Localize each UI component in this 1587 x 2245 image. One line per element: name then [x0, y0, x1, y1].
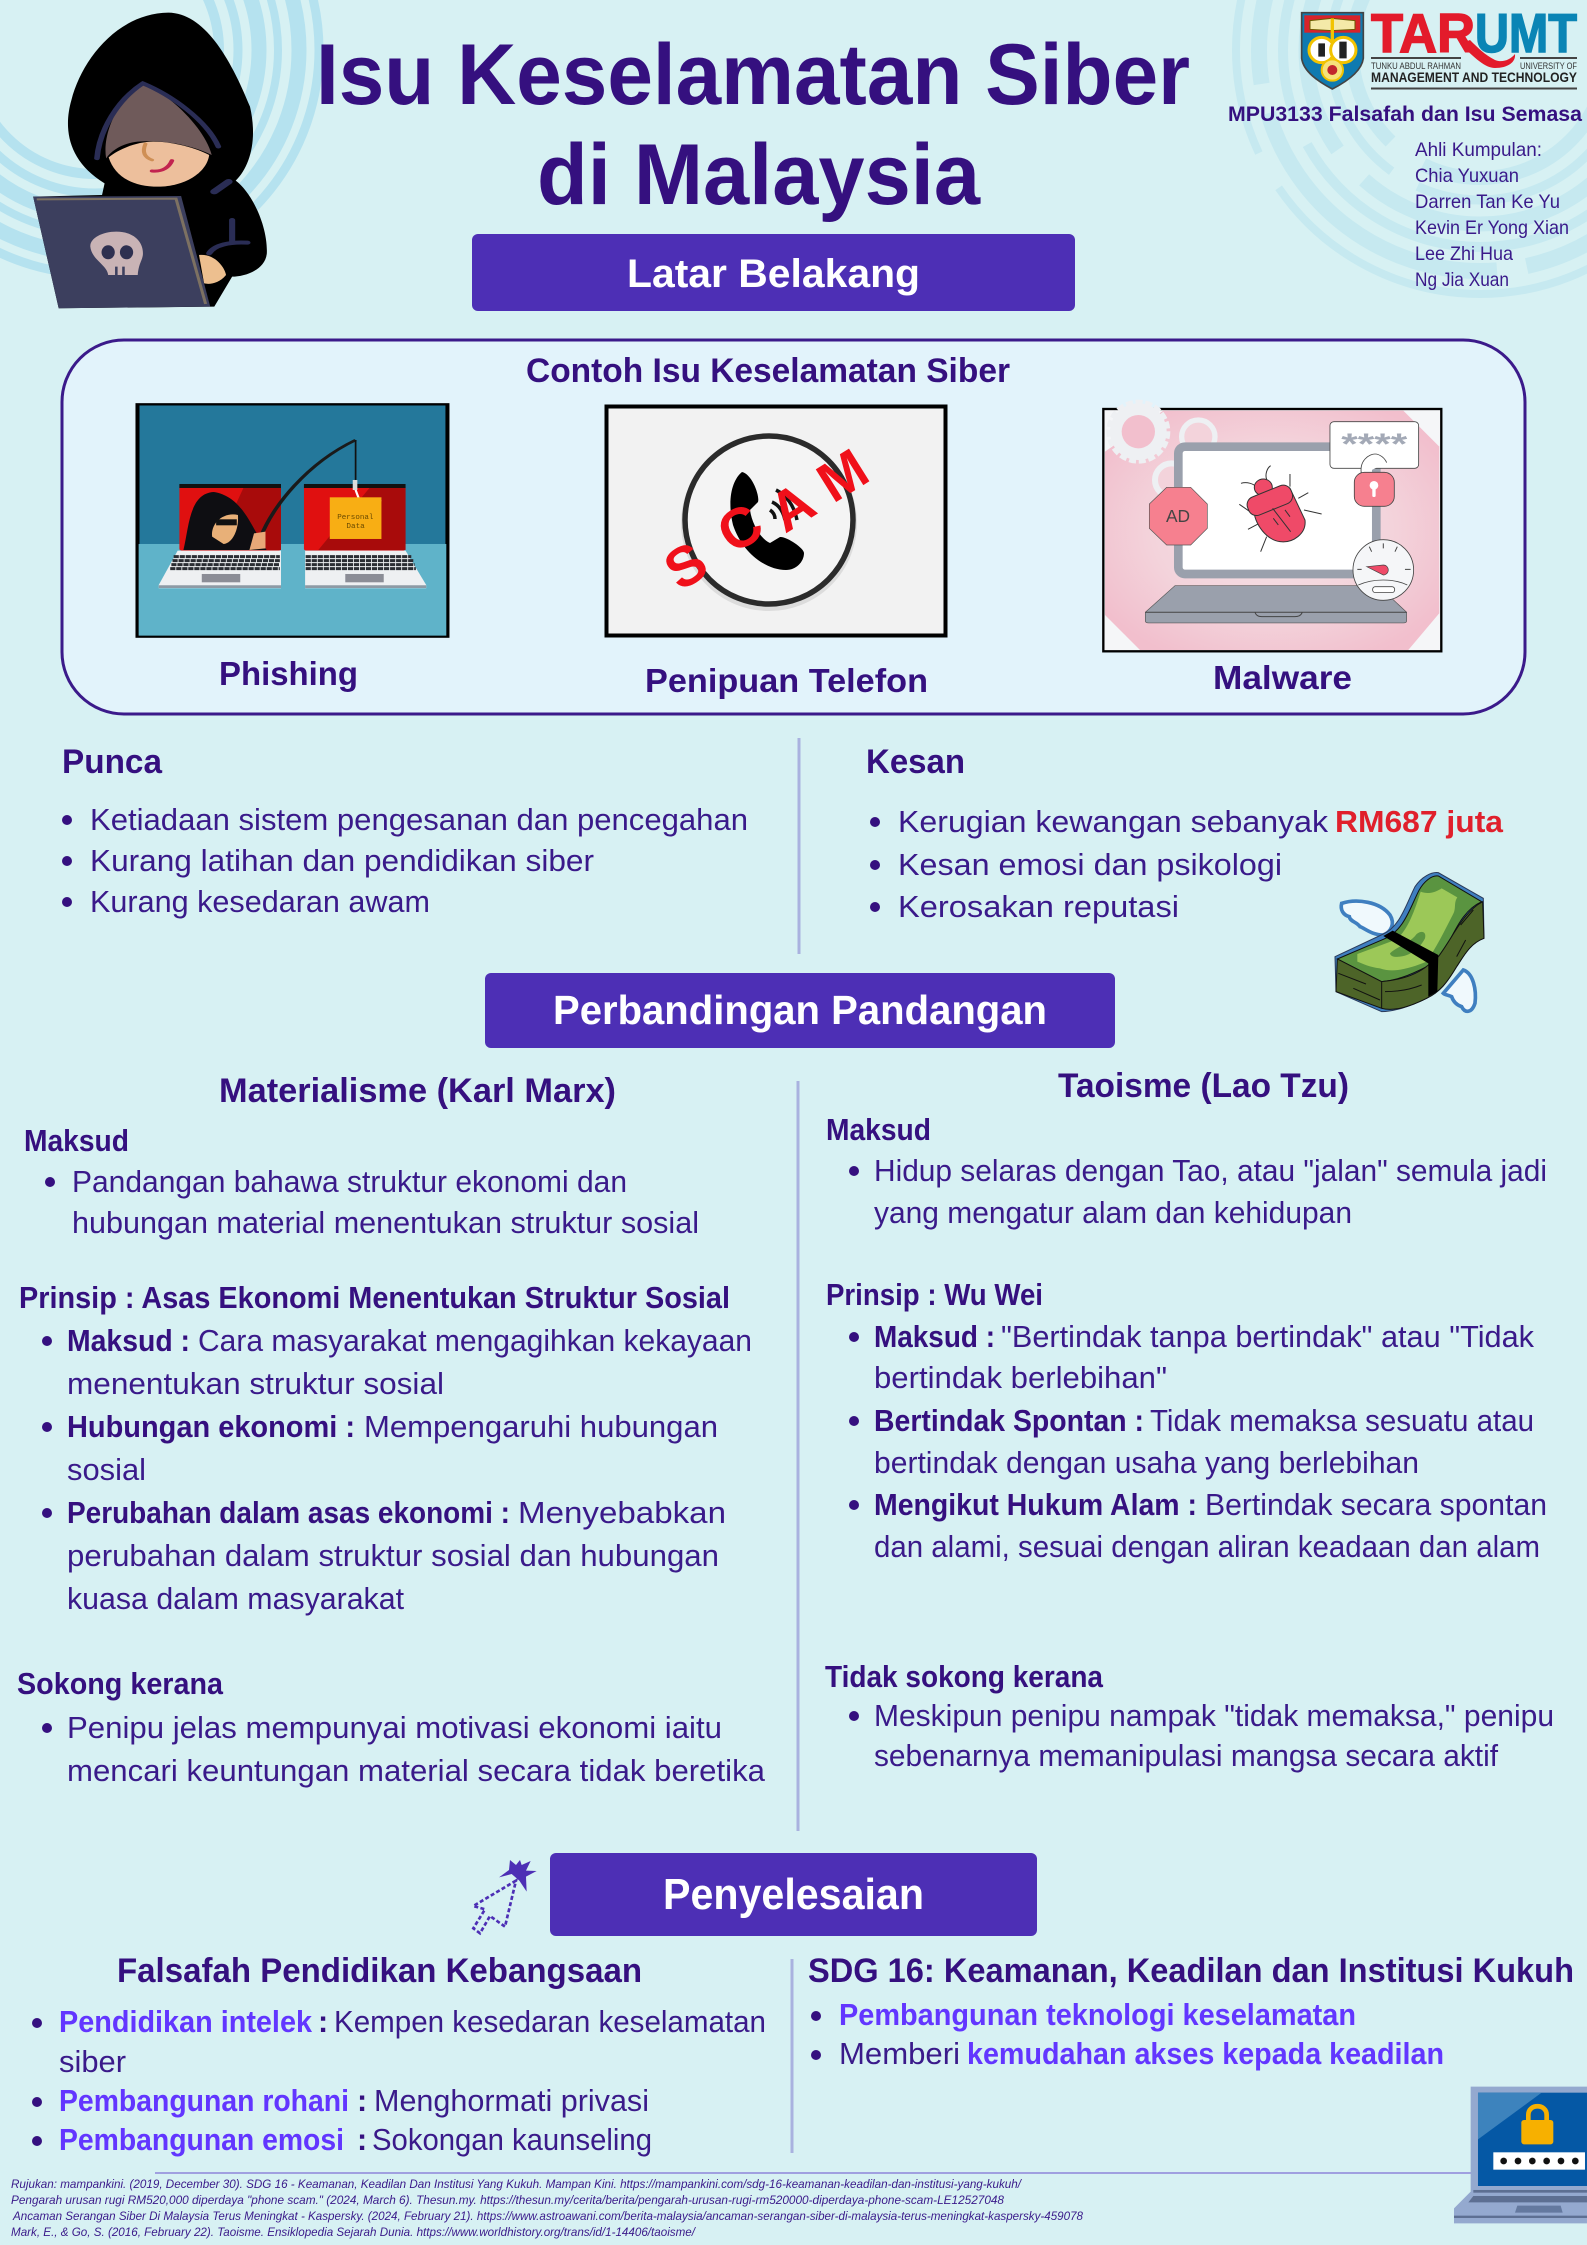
column: SDG 16: Pembangunan teknologi keselamatan: [839, 1998, 1356, 2032]
column: Falsafah Pendidikan Kebangsaan: :: [318, 2005, 328, 2039]
icon: cursor click: [473, 1860, 537, 1933]
text block: Kesan: Kesan emosi dan psikologi: [898, 848, 1282, 882]
column: Materialisme: Perubahan dalam asas ekonomi :: [67, 1496, 510, 1530]
logo: TARUMT: [1302, 2, 1577, 90]
group members: Chia Yuxuan: [1415, 165, 1519, 187]
text block: Kesan: Kerugian kewangan sebanyak: [898, 805, 1329, 839]
column: Falsafah Pendidikan Kebangsaan: :: [357, 2084, 367, 2118]
column: Falsafah Pendidikan Kebangsaan: Kempen kesedaran keselamatan: [334, 2005, 766, 2039]
column: Materialisme: sosial: [67, 1453, 146, 1487]
column: Taoisme: sebenarnya memanipulasi mangsa secara aktif: [874, 1739, 1499, 1773]
title: [316, 27, 1190, 223]
text block: Punca: Punca: [62, 743, 163, 781]
icon: flying money: [1335, 873, 1484, 1012]
column: Falsafah Pendidikan Kebangsaan: Falsafah Pendidikan Kebangsaan: [117, 1952, 642, 1990]
logo: TARUMT: UNIVERSITY OF: [1520, 61, 1577, 71]
label: Malware: Malware: [1213, 659, 1352, 696]
column: Materialisme: mencari keuntungan material secara tidak beretika: [67, 1754, 765, 1788]
references: Pengarah urusan rugi RM520,000 diperdaya "phone scam." (2024, March 6). Thesun.my. https://thesun.my/cerita/berita/pengarah-urusan-rugi-rm520000-diperdaya-phone-scam-LE12527048: [11, 2193, 1004, 2207]
course code: MPU3133 Falsafah dan Isu Semasa: [1228, 102, 1583, 126]
column: Taoisme: Maksud :: [874, 1320, 995, 1354]
image: malware: AD: [1166, 506, 1190, 526]
column: Taoisme: Tidak sokong kerana: [825, 1660, 1104, 1694]
column: Falsafah Pendidikan Kebangsaan: :: [357, 2123, 367, 2157]
column: Taoisme: Bertindak secara spontan: [1205, 1488, 1547, 1522]
text block: Kesan: [866, 743, 1504, 924]
column: Materialisme: Pandangan bahawa struktur ekonomi dan: [72, 1165, 627, 1199]
logo: TARUMT: TUNKU ABDUL RAHMAN: [1371, 61, 1461, 71]
column: Materialisme: kuasa dalam masyarakat: [67, 1582, 405, 1616]
image: phone scam: S: [653, 529, 718, 602]
icon: hooded hacker with laptop: [33, 13, 267, 308]
image: phone scam: M: [806, 436, 879, 514]
column: Materialisme: Penipu jelas mempunyai motivasi ekonomi iaitu: [67, 1711, 722, 1745]
heading: Perbandingan Pandangan: [485, 973, 1115, 1048]
column: Taoisme: Maksud: [826, 1113, 931, 1147]
label: Phishing: Phishing: [219, 655, 358, 692]
image: phishing: Data: [346, 522, 365, 530]
image: phone scam: C: [706, 490, 774, 565]
image: malware: ****: [1341, 428, 1408, 461]
column: Materialisme: Hubungan ekonomi :: [67, 1410, 355, 1444]
image: phone scam: A: [758, 469, 826, 544]
title: di Malaysia: [537, 127, 981, 223]
column: Falsafah Pendidikan Kebangsaan: Pembangunan rohani: [59, 2084, 349, 2118]
column: SDG 16: [808, 1952, 1574, 2071]
column: Materialisme: hubungan material menentukan struktur sosial: [72, 1206, 699, 1240]
column: Materialisme: Maksud: [24, 1124, 129, 1158]
column: Taoisme: Hidup selaras dengan Tao, atau "jalan" semula jadi: [874, 1154, 1547, 1188]
panel heading: Contoh Isu Keselamatan Siber: [526, 352, 1010, 390]
column: Materialisme: perubahan dalam struktur sosial dan hubungan: [67, 1539, 719, 1573]
column: Materialisme: Cara masyarakat mengagihkan kekayaan: [198, 1324, 752, 1358]
column: Falsafah Pendidikan Kebangsaan: Pendidikan intelek: [59, 2005, 312, 2039]
column: Taoisme: Prinsip : Wu Wei: [826, 1278, 1043, 1312]
heading: Perbandingan Pandangan: Perbandingan Pandangan: [553, 987, 1047, 1033]
group members: Ahli Kumpulan:: [1415, 139, 1542, 161]
heading: Penyelesaian: Penyelesaian: [663, 1870, 924, 1919]
column: Taoisme: [825, 1067, 1554, 1773]
column: Taoisme: Bertindak Spontan :: [874, 1404, 1144, 1438]
references: Mark, E., & Go, S. (2016, February 22). Taoisme. Ensiklopedia Sejarah Dunia. https://www.worldhistory.org/trans/id/1-14406/taoisme/: [11, 2225, 697, 2239]
heading: Penyelesaian: [550, 1853, 1037, 1936]
column: Taoisme: yang mengatur alam dan kehidupan: [874, 1196, 1352, 1230]
group members: Darren Tan Ke Yu: [1415, 191, 1560, 213]
text block: Punca: Ketiadaan sistem pengesanan dan pencegahan: [90, 803, 748, 837]
column: Taoisme: bertindak berlebihan": [874, 1361, 1167, 1395]
group members: [1415, 139, 1569, 291]
column: Taoisme: Mengikut Hukum Alam :: [874, 1488, 1197, 1522]
icon: university shield: [1302, 13, 1363, 89]
column: SDG 16: Memberi: [839, 2037, 960, 2071]
wordmark: TAR: [1371, 2, 1475, 64]
column: SDG 16: kemudahan akses kepada keadilan: [967, 2037, 1444, 2071]
column: Materialisme: [17, 1072, 765, 1788]
title: Isu Keselamatan Siber: [316, 27, 1190, 123]
label: Penipuan Telefon: Penipuan Telefon: [645, 662, 928, 699]
text block: Kesan: Kesan: [866, 743, 965, 781]
column: Taoisme: bertindak dengan usaha yang berlebihan: [874, 1446, 1419, 1480]
column: Taoisme: dan alami, sesuai dengan aliran keadaan dan alam: [874, 1530, 1540, 1564]
column: Materialisme: menentukan struktur sosial: [67, 1367, 444, 1401]
heading: Latar Belakang: Latar Belakang: [627, 252, 920, 296]
references: [11, 2177, 1083, 2239]
text block: Kesan: Kerosakan reputasi: [898, 890, 1179, 924]
column: Materialisme: Prinsip : Asas Ekonomi Menentukan Struktur Sosial: [19, 1281, 730, 1315]
text block: Punca: [62, 743, 748, 919]
image: phishing: [137, 404, 447, 637]
column: Taoisme: Meskipun penipu nampak "tidak memaksa," penipu: [874, 1699, 1554, 1733]
group members: Kevin Er Yong Xian: [1415, 217, 1569, 239]
group members: Ng Jia Xuan: [1415, 269, 1509, 291]
text block: Kesan: RM687 juta: [1335, 805, 1504, 839]
panel: examples of cyber security issues: [62, 340, 1525, 714]
text block: Punca: Kurang kesedaran awam: [90, 885, 430, 919]
image: phishing: Personal: [337, 513, 373, 521]
column: Materialisme: Mempengaruhi hubungan: [364, 1410, 718, 1444]
column: Materialisme: Sokong kerana: [17, 1667, 224, 1701]
column: SDG 16: SDG 16: Keamanan, Keadilan dan Institusi Kukuh: [808, 1952, 1574, 1990]
column: Materialisme: Maksud :: [67, 1324, 190, 1358]
group members: Lee Zhi Hua: [1415, 243, 1513, 265]
column: Materialisme: Materialisme (Karl Marx): [219, 1072, 616, 1110]
column: Falsafah Pendidikan Kebangsaan: siber: [59, 2045, 126, 2079]
column: Taoisme: Tidak memaksa sesuatu atau: [1150, 1404, 1534, 1438]
column: Taoisme: "Bertindak tanpa bertindak" atau "Tidak: [1001, 1320, 1535, 1354]
column: Taoisme: Taoisme (Lao Tzu): [1058, 1067, 1349, 1105]
references: Rujukan: mampankini. (2019, December 30). SDG 16 - Keamanan, Keadilan Dan Institusi Yang Kukuh. Mampan Kini. https://mampankini.com/sdg-16-keamanan-keadilan-dan-institusi-yang-kukuh/: [11, 2177, 1023, 2191]
image: malware: [1103, 403, 1441, 651]
text block: Punca: Kurang latihan dan pendidikan siber: [90, 844, 594, 878]
column: Falsafah Pendidikan Kebangsaan: Menghormati privasi: [374, 2084, 649, 2118]
column: Falsafah Pendidikan Kebangsaan: Pembangunan emosi: [59, 2123, 344, 2157]
references: Ancaman Serangan Siber Di Malaysia Terus Meningkat - Kaspersky. (2024, February 21). https://www.astroawani.com/berita-malaysia/ancaman-serangan-siber-di-malaysia-terus-meningkat-kaspersky-459078: [12, 2209, 1083, 2223]
heading: Latar Belakang: [472, 234, 1075, 311]
column: Materialisme: Menyebabkan: [518, 1496, 726, 1530]
column: Falsafah Pendidikan Kebangsaan: [32, 1952, 766, 2157]
image: phone scam: [606, 406, 946, 636]
icon: laptop with lock: [1454, 2087, 1587, 2223]
column: Falsafah Pendidikan Kebangsaan: Sokongan kaunseling: [372, 2123, 652, 2157]
